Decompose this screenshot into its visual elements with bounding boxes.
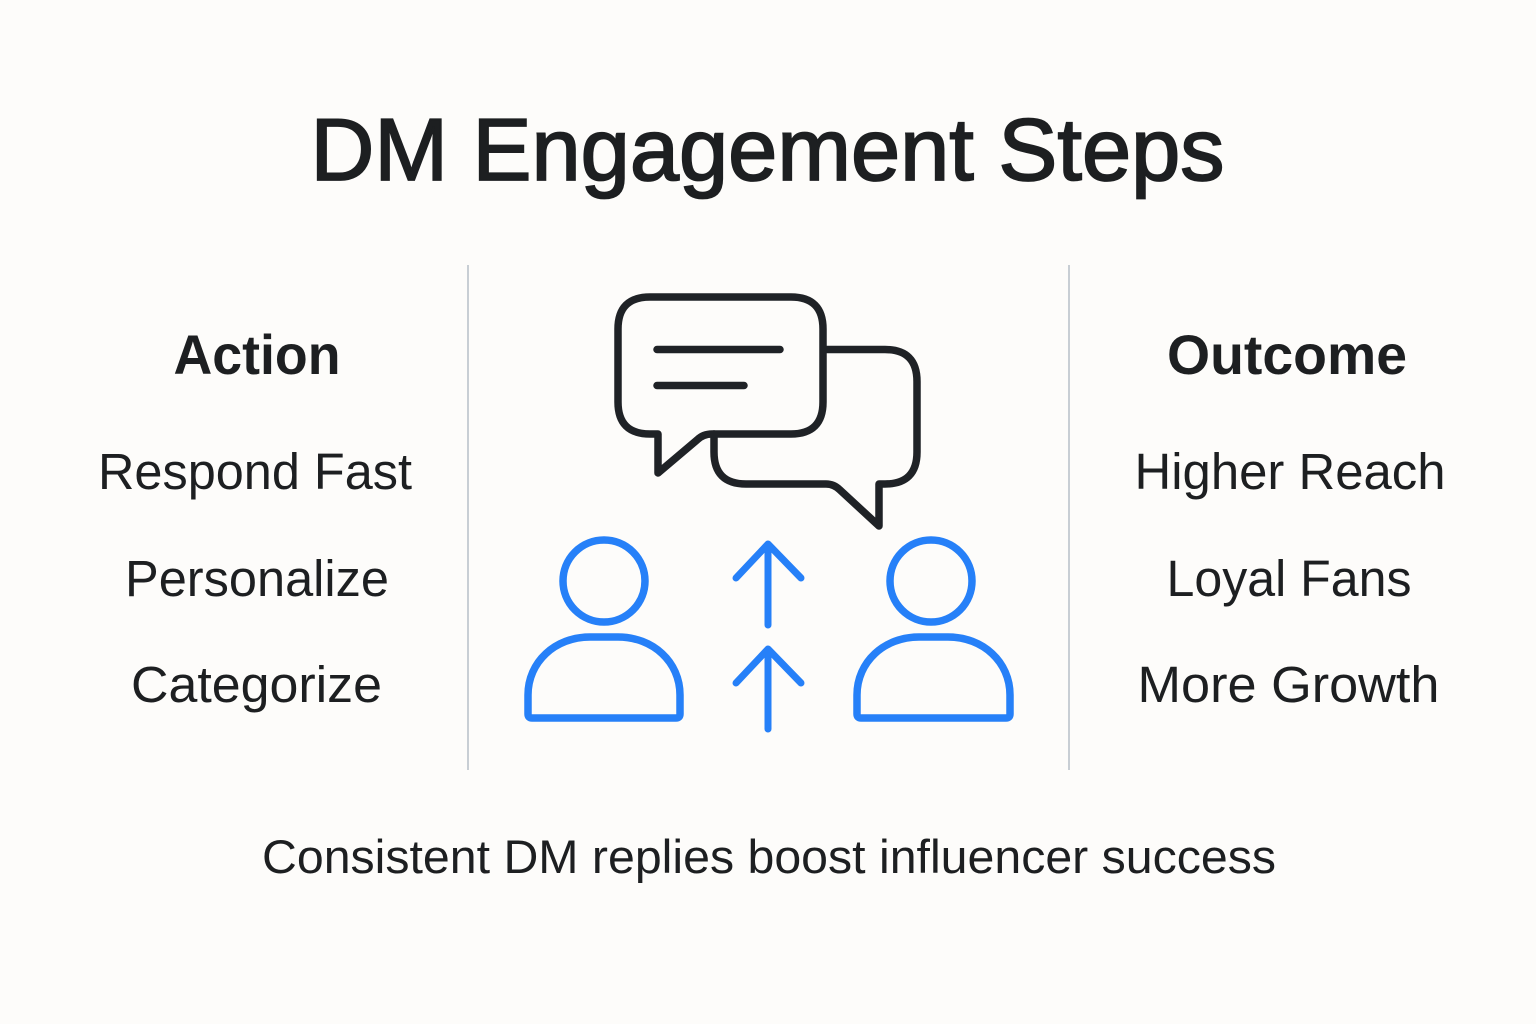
arrow: upper: [736, 544, 801, 625]
heading: action: Action: [174, 323, 340, 386]
panel: action: [98, 323, 412, 713]
item: loyal fans: Loyal Fans: [1166, 550, 1412, 607]
arrow: lower: [736, 649, 801, 729]
item: categorize: Categorize: [131, 656, 382, 713]
icon: chat bubbles: [618, 297, 917, 526]
icon: left person: [528, 540, 680, 718]
panel: outcome: [1134, 323, 1446, 713]
item: respond fast: Respond Fast: [98, 443, 412, 500]
icon: right person: [857, 540, 1010, 718]
heading: outcome: Outcome: [1167, 323, 1407, 386]
item: more growth: More Growth: [1138, 656, 1440, 713]
caption: Consistent DM replies boost influencer success: [262, 830, 1276, 883]
title: DM Engagement Steps: [310, 100, 1224, 199]
item: higher reach: Higher Reach: [1134, 443, 1446, 500]
item: personalize: Personalize: [125, 550, 389, 607]
